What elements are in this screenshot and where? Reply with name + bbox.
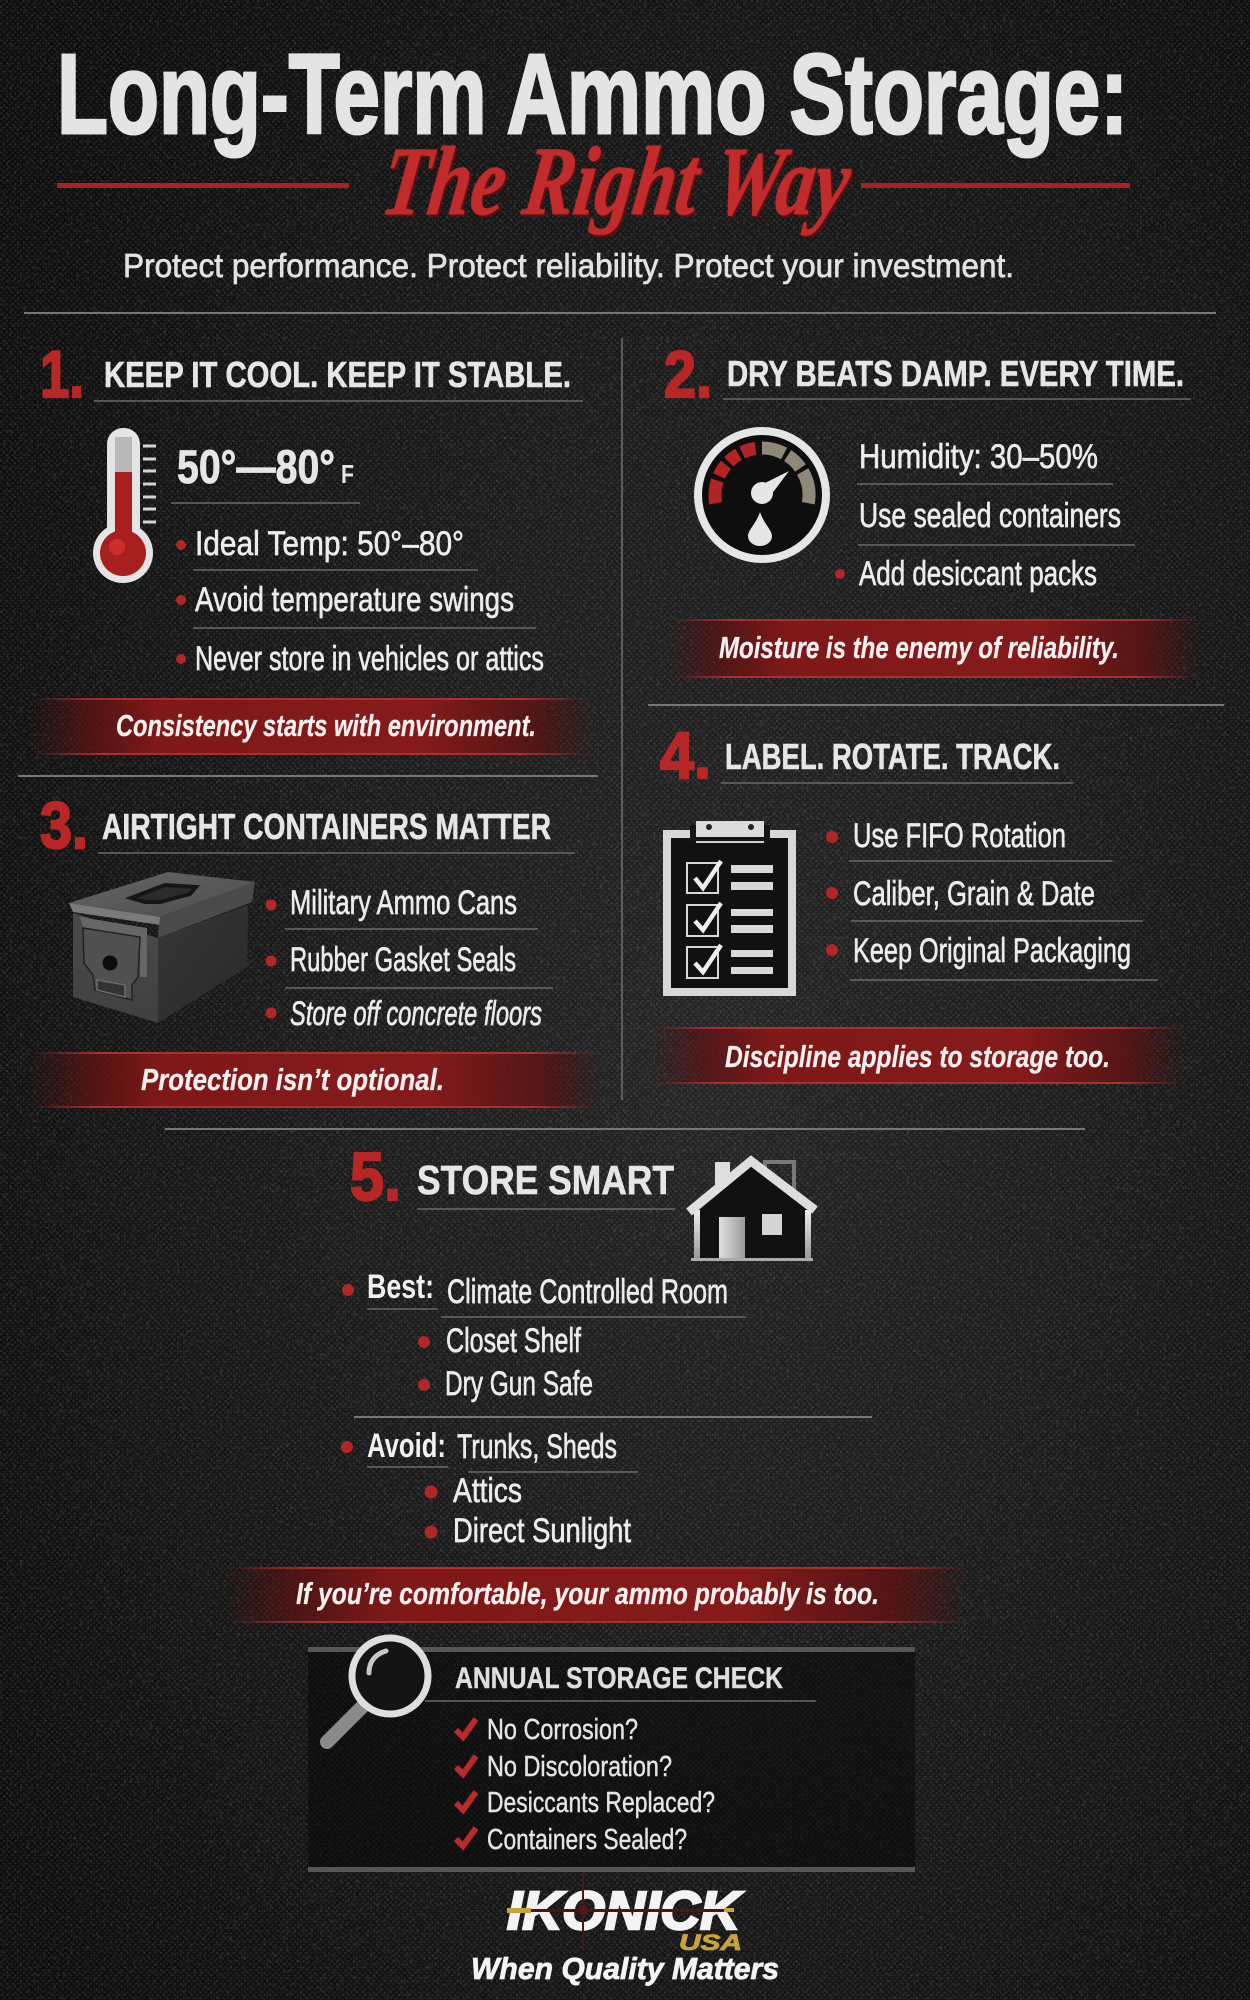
- number 2: 2.: [664, 337, 712, 411]
- best list: Dry Gun Safe: [445, 1365, 593, 1403]
- avoid list: Attics: [453, 1472, 522, 1510]
- bullet list: [826, 817, 1158, 980]
- callout 2: Moisture is the enemy of reliability.: [719, 630, 1119, 665]
- temperature range: F: [341, 459, 354, 489]
- number 5: 5.: [350, 1139, 401, 1215]
- panel: section 5 store smart: [223, 1139, 969, 1623]
- bullet list: Avoid temperature swings: [195, 581, 514, 619]
- wordmark: IKONICK: [507, 1881, 744, 1941]
- panel: section 2 dry beats damp: [664, 337, 1199, 678]
- avoid list: Trunks, Sheds: [457, 1428, 617, 1466]
- bullet list: Ideal Temp: 50°–80°: [195, 525, 464, 563]
- tagline: When Quality Matters: [471, 1951, 779, 1986]
- usa: USA: [679, 1930, 742, 1955]
- icon: clipboard checklist: [667, 821, 792, 992]
- callout 5: [223, 1567, 969, 1623]
- checklist: No Discoloration?: [487, 1751, 672, 1783]
- number 4: 4.: [660, 718, 711, 792]
- best list: Climate Controlled Room: [447, 1273, 728, 1311]
- header: [57, 31, 1130, 284]
- bullet list: [266, 884, 553, 1033]
- bullet list: Store off concrete floors: [290, 995, 542, 1033]
- panel: annual storage check: [308, 1638, 915, 1872]
- callout 1: [32, 698, 590, 755]
- callout 3: [30, 1052, 600, 1108]
- check heading: ANNUAL STORAGE CHECK: [455, 1662, 783, 1695]
- checklist: [456, 1714, 715, 1856]
- heading 5: STORE SMART: [417, 1157, 674, 1203]
- panel: section 4 label rotate track: [653, 718, 1183, 1084]
- callout 2: [669, 619, 1199, 678]
- bullet list: Rubber Gasket Seals: [290, 941, 516, 979]
- icon: ammo can: [69, 872, 255, 1023]
- number 1: 1.: [40, 337, 84, 411]
- icon: magnifying glass: [327, 1638, 428, 1742]
- panel: section 3 airtight containers: [30, 788, 600, 1108]
- best list: [342, 1268, 746, 1403]
- callout 3: Protection isn’t optional.: [141, 1062, 444, 1097]
- icon: thermometer: [93, 428, 156, 583]
- icon: humidity gauge: [698, 431, 826, 559]
- checklist: No Corrosion?: [487, 1714, 638, 1746]
- callout 1: Consistency starts with environment.: [116, 708, 536, 743]
- heading 4: LABEL. ROTATE. TRACK.: [725, 736, 1060, 777]
- temperature range: 50°—80°: [177, 440, 335, 493]
- crosshair: [507, 1873, 736, 1950]
- bullet list: Use sealed containers: [859, 497, 1121, 535]
- bullet list: Add desiccant packs: [859, 555, 1097, 593]
- avoid list: [341, 1427, 638, 1550]
- bullet list: Humidity: 30–50%: [859, 438, 1098, 476]
- number 3: 3.: [40, 788, 88, 862]
- tagline: Protect performance. Protect reliability. Protect your investment.: [123, 247, 1014, 284]
- panel: section 1 keep it cool: [32, 337, 590, 755]
- bullet list: [176, 525, 544, 678]
- heading 3: AIRTIGHT CONTAINERS MATTER: [102, 806, 551, 847]
- bullet list: [835, 438, 1135, 593]
- callout 4: [653, 1027, 1183, 1084]
- bullet list: Use FIFO Rotation: [853, 817, 1066, 855]
- heading 1: KEEP IT COOL. KEEP IT STABLE.: [104, 354, 571, 395]
- best list: Closet Shelf: [446, 1322, 581, 1360]
- checklist: Containers Sealed?: [487, 1824, 687, 1856]
- bullet list: Military Ammo Cans: [290, 884, 517, 922]
- checklist: Desiccants Replaced?: [487, 1787, 715, 1819]
- bullet list: Caliber, Grain & Date: [853, 875, 1095, 913]
- callout 5: If you’re comfortable, your ammo probably is too.: [296, 1576, 879, 1611]
- best list: Best:: [367, 1268, 434, 1306]
- callout 4: Discipline applies to storage too.: [725, 1039, 1110, 1074]
- right red rule: [861, 183, 1130, 188]
- left red rule: [57, 183, 349, 188]
- bullet list: Never store in vehicles or attics: [195, 640, 544, 678]
- avoid list: Avoid:: [367, 1427, 446, 1465]
- avoid list: Direct Sunlight: [453, 1512, 631, 1550]
- logo: [471, 1873, 779, 1986]
- subtitle script: The Right Way: [376, 127, 857, 236]
- icon: house: [689, 1160, 815, 1261]
- bullet list: Keep Original Packaging: [853, 932, 1131, 970]
